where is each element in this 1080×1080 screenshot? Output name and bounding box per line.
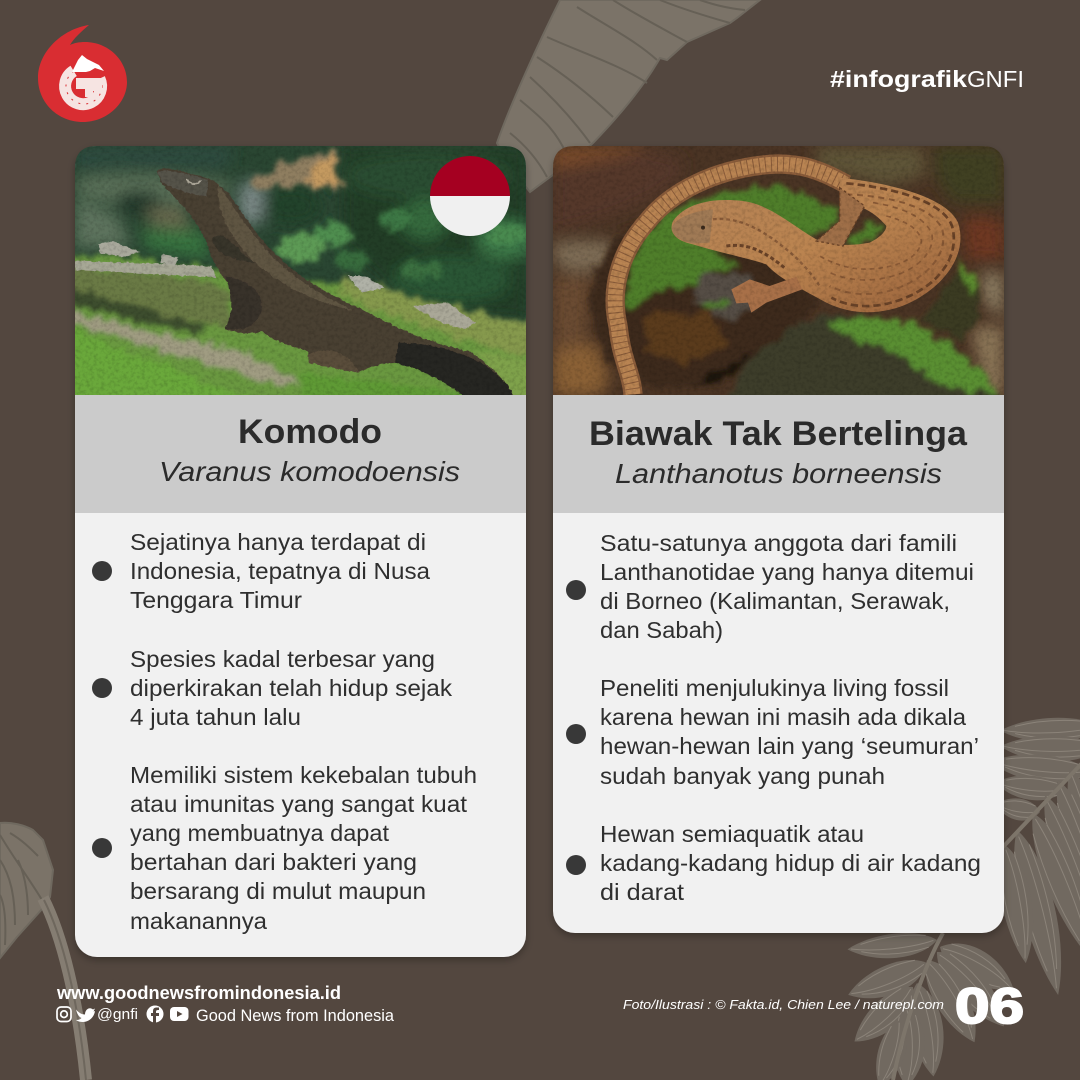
fact 1: Indonesia, tepatnya di Nusa — [130, 558, 431, 584]
photo: Komodo dragon — [75, 146, 526, 395]
card background — [75, 146, 526, 957]
photo credit: Foto/Ilustrasi : © Fakta.id, Chien Lee / naturepl.com — [623, 997, 944, 1012]
fact 1: Lanthanotidae yang hanya ditemui — [600, 559, 974, 585]
footer: website and socials — [56, 982, 395, 1025]
fact 2: hewan-hewan lain yang ‘seumuran’ — [600, 733, 979, 759]
hashtag suffix: GNFI — [967, 66, 1024, 92]
fact 1: Sejatinya hanya terdapat di — [130, 529, 426, 555]
heading: Biawak Tak Bertelinga: Biawak Tak Bertelinga — [589, 415, 968, 453]
fact 3: bertahan dari bakteri yang — [130, 849, 417, 875]
decorative leaf: top centre — [497, 0, 760, 192]
fact 3: Hewan semiaquatik atau — [600, 821, 864, 847]
fact 1 — [92, 529, 431, 613]
panel: Biawak Tak Bertelinga — [553, 146, 1004, 933]
fact 3: kadang-kadang hidup di air kadang — [600, 850, 981, 876]
icon: instagram — [57, 1007, 71, 1022]
decorative leaf: bottom left — [0, 823, 86, 1080]
fact 3: Memiliki sistem kekebalan tubuh — [130, 762, 477, 788]
card background — [553, 146, 1004, 933]
fact 3: bersarang di mulut maupun — [130, 878, 426, 904]
fact 2: sudah banyak yang punah — [600, 763, 885, 789]
decorative palm fronds: bottom right — [843, 716, 1080, 1080]
page number: 06 — [955, 978, 1024, 1034]
fact 3: atau imunitas yang sangat kuat — [130, 791, 467, 817]
fact 1 — [566, 530, 974, 643]
fact 3 — [566, 821, 981, 905]
fact 1: di Borneo (Kalimantan, Serawak, — [600, 588, 950, 614]
fact 2: karena hewan ini masih ada dikala — [600, 704, 967, 730]
fact 2: 4 juta tahun lalu — [130, 704, 301, 730]
hashtag: #infografik — [830, 66, 967, 92]
fact 1: dan Sabah) — [600, 617, 723, 643]
icon: youtube — [170, 1007, 188, 1021]
flag: Indonesia — [430, 156, 510, 236]
footer: website and socials: www.goodnewsfromindonesia.id — [56, 982, 341, 1003]
fact 3: makanannya — [130, 908, 268, 934]
fact 2: diperkirakan telah hidup sejak — [130, 675, 452, 701]
page name: Good News from Indonesia — [196, 1006, 395, 1025]
photo: earless monitor lizard — [553, 146, 1004, 403]
scientific name: Lanthanotus borneensis — [615, 458, 942, 489]
fact 3: yang membuatnya dapat — [130, 820, 389, 846]
panel: Komodo — [62, 146, 542, 957]
fact 1: Tenggara Timur — [130, 587, 302, 613]
handle: @gnfi — [97, 1007, 138, 1023]
scientific name: Varanus komodoensis — [159, 456, 460, 487]
fact 1: Satu-satunya anggota dari famili — [600, 530, 957, 556]
title band — [553, 395, 1004, 513]
fact 2: Spesies kadal terbesar yang — [130, 646, 435, 672]
heading: Komodo: Komodo — [238, 413, 382, 451]
fact 2 — [92, 646, 452, 730]
fact 2 — [566, 675, 979, 789]
fact 3 — [92, 762, 477, 934]
icon: facebook — [146, 1006, 164, 1023]
icon: twitter — [76, 1008, 95, 1022]
fact 2: Peneliti menjulukinya living fossil — [600, 675, 949, 701]
fact 3: di darat — [600, 879, 684, 905]
title band — [75, 395, 526, 513]
logo: GNFI — [38, 25, 127, 122]
